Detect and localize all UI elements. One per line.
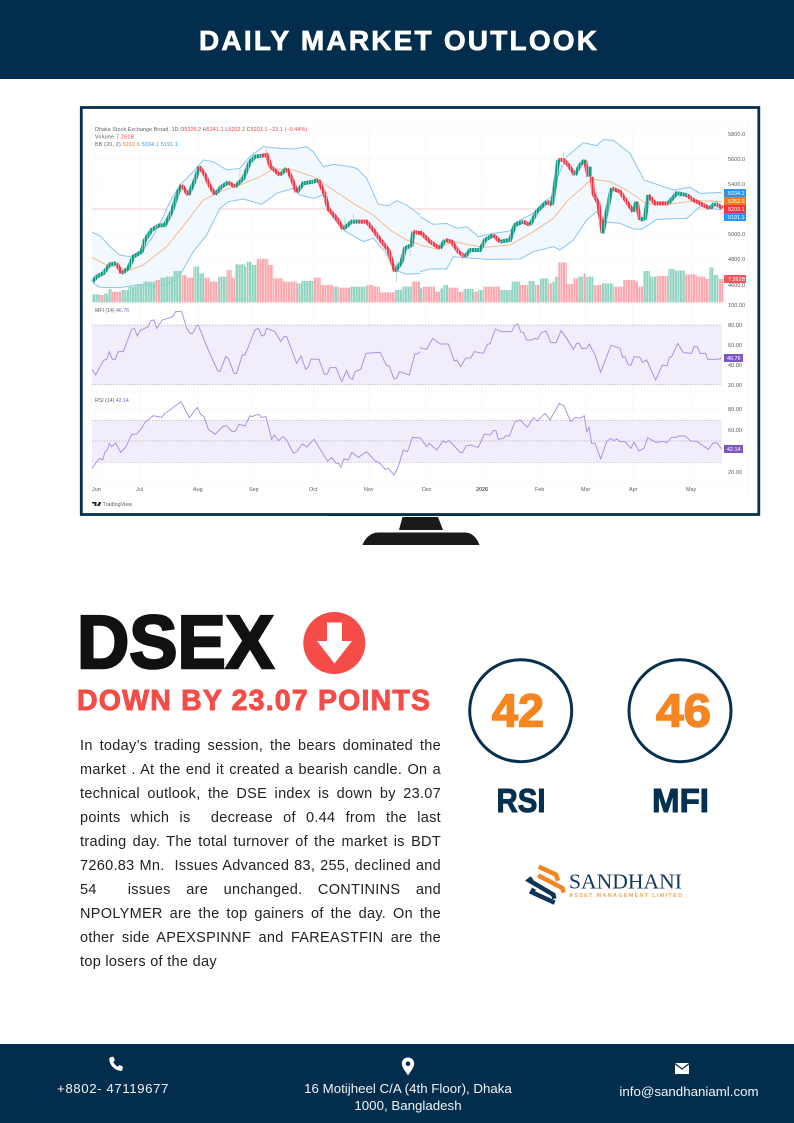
price axis labels: 20.00 <box>728 383 742 389</box>
market commentary: technical outlook, the DSE index is down by 23.07 <box>80 786 441 802</box>
RSI gauge <box>470 660 572 820</box>
phone number: +8802- 47119677 <box>57 1081 169 1096</box>
time axis labels: Dec <box>422 487 432 493</box>
market commentary: points which is decrease of 0.44 from the last <box>80 810 441 826</box>
time axis labels: Feb <box>535 487 544 493</box>
grid and pane frames <box>92 122 748 496</box>
market commentary: other side APEXSPINNF and FAREASTFIN are the <box>80 930 441 946</box>
time axis labels: Aug <box>193 487 203 493</box>
price axis value tags: 5334.1 <box>728 191 744 197</box>
icon: down arrow <box>303 612 365 674</box>
market commentary: 54 issues are unchanged. CONTININS and <box>80 882 441 898</box>
footer bar <box>0 1044 794 1123</box>
monitor with stock chart <box>80 106 760 545</box>
time axis labels: Nov <box>364 487 374 493</box>
TradingView logo: TradingView <box>102 502 132 508</box>
price axis value tags <box>724 189 746 453</box>
address <box>304 1081 512 1113</box>
price axis labels: 60.00 <box>728 428 742 434</box>
MFI gauge: MFI <box>652 783 709 820</box>
icon: location pin <box>402 1058 414 1076</box>
chart legend: Dhaka Stock Exchange Broad, 1D O5226.2 H5241.1 L5202.2 C5203.1 −23.1 (−0.44%) <box>95 127 307 133</box>
chart legend: RSI (14) 42.14 <box>95 398 129 404</box>
time axis labels: Mar <box>581 487 590 493</box>
RSI gauge: 42 <box>492 685 544 737</box>
price axis labels: 80.00 <box>728 407 742 413</box>
time axis labels: May <box>686 487 696 493</box>
header banner <box>0 0 794 79</box>
market commentary: NPOLYMER are the top gainers of the day. On the <box>80 906 441 922</box>
volume bars <box>92 259 723 302</box>
chart legend <box>95 127 307 404</box>
time axis labels: Oct <box>309 487 318 493</box>
price axis labels: 5600.0 <box>728 157 745 163</box>
bollinger bands left half <box>92 147 420 288</box>
MFI gauge: 46 <box>656 685 711 737</box>
time axis labels <box>92 487 696 493</box>
price axis value tags: 5203.1 <box>728 207 744 213</box>
monitor frame <box>81 108 759 514</box>
price axis labels: 100.00 <box>728 303 745 309</box>
icon: phone <box>109 1056 123 1071</box>
time axis labels: Sep <box>249 487 259 493</box>
price axis labels: 40.00 <box>728 363 742 369</box>
RSI panel <box>92 402 722 475</box>
address: 16 Motijheel C/A (4th Floor), Dhaka <box>304 1081 512 1096</box>
chart legend: BB (20, 2) 5262.6 5334.1 5191.1 <box>95 142 178 148</box>
icon: envelope <box>675 1063 689 1074</box>
monitor stand <box>327 513 480 545</box>
DSEX title: DSEX <box>77 600 274 684</box>
time axis labels: Jul <box>136 487 143 493</box>
price axis labels: 80.00 <box>728 323 742 329</box>
Sandhani logo <box>525 864 682 905</box>
price axis labels: 5800.0 <box>728 132 745 138</box>
MFI gauge <box>629 660 731 820</box>
market commentary: top losers of the day <box>80 954 217 970</box>
price axis labels: 4800.0 <box>728 257 745 263</box>
points change subheading: DOWN BY 23.07 POINTS <box>77 685 430 717</box>
address: 1000, Bangladesh <box>354 1098 462 1113</box>
price axis value tags: 7.261B <box>728 277 745 283</box>
bollinger bands right half <box>420 140 722 272</box>
price axis labels: 5000.0 <box>728 232 745 238</box>
indicators: RSI and MFI <box>468 658 732 820</box>
price axis value tags: 5191.1 <box>728 215 744 221</box>
chart legend: Volume 7.261B <box>95 134 135 140</box>
market commentary: trading day. The total turnover of the market is BDT <box>80 834 441 850</box>
price axis labels: 20.00 <box>728 470 742 476</box>
current price line <box>92 208 722 210</box>
time axis labels: Jun <box>92 487 101 493</box>
logo wordmark: SANDHANI <box>569 870 682 894</box>
market commentary <box>80 738 441 970</box>
DSEX heading block <box>77 600 430 717</box>
price axis value tags: 5262.6 <box>728 199 744 205</box>
price axis labels <box>728 132 745 476</box>
time axis labels: Apr <box>629 487 638 493</box>
title: DAILY MARKET OUTLOOK <box>199 25 597 56</box>
chart legend: MFI (14) 46.76 <box>95 308 129 314</box>
price axis value tags: 42.14 <box>727 447 740 453</box>
RSI gauge: RSI <box>496 783 546 820</box>
price axis value tags: 46.76 <box>727 356 740 362</box>
time axis labels: 2026 <box>476 487 488 493</box>
logo tagline: ASSET MANAGEMENT LIMITED <box>569 893 682 899</box>
price axis labels: 5400.0 <box>728 182 745 188</box>
market commentary: In today’s trading session, the bears dominated the <box>80 738 441 754</box>
price axis labels: 4600.0 <box>728 283 745 289</box>
email: info@sandhaniaml.com <box>619 1084 759 1099</box>
trading chart <box>92 122 748 508</box>
price axis labels: 60.00 <box>728 343 742 349</box>
logo mark <box>529 867 564 903</box>
candlesticks <box>93 149 723 282</box>
MFI panel <box>92 312 722 385</box>
market commentary: market . At the end it created a bearish candle. On a <box>80 762 441 778</box>
market commentary: 7260.83 Mn. Issues Advanced 83, 255, declined and <box>80 858 441 874</box>
